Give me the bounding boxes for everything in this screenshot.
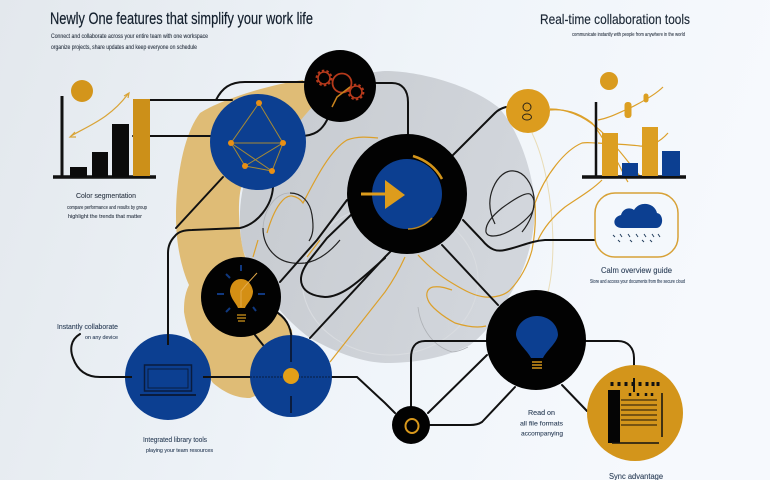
gray thin loop lines [263, 193, 468, 352]
caption: bulb: all file formats [520, 422, 563, 428]
caption: cloud card [590, 266, 685, 285]
icon: notebook circle [587, 365, 683, 461]
icon: small ring circle [392, 406, 430, 444]
caption: cloud card: Store and access your documents from the secure cloud [590, 279, 685, 285]
title: left: Newly One features that simplify your work life [50, 10, 313, 28]
caption: bulb: Read on [528, 408, 555, 417]
icon: gears circle [304, 50, 376, 122]
icon: yellow people circle [506, 89, 550, 133]
caption: left laptop note: Instantly collaborate [57, 324, 118, 331]
caption: left chart [67, 193, 147, 220]
caption: left laptop note [57, 324, 118, 341]
caption: bulb [520, 408, 563, 438]
subtitle: left: Connect and collaborate across your entire team with one workspace [51, 34, 209, 40]
curved thin black loops [263, 171, 534, 263]
icon: large bulb circle [486, 290, 586, 390]
tan background shape [176, 80, 312, 398]
gray background blob [240, 71, 535, 363]
icon: central play circle [347, 134, 467, 254]
icon: cloud card [595, 193, 678, 257]
caption: bulb: accompanying [521, 432, 563, 438]
caption: left chart: highlight the trends that matter [68, 214, 142, 220]
caption: left chart: compare performance and results by group [67, 205, 147, 211]
caption: laptop bottom: playing your team resources [146, 448, 213, 454]
caption: left chart: Color segmentation [76, 193, 136, 200]
faint inner ring [302, 205, 478, 355]
connector lines [71, 82, 634, 425]
caption: laptop bottom: Integrated library tools [143, 437, 207, 444]
icon: right bar chart [582, 72, 686, 177]
caption: left laptop note: on any device [85, 335, 118, 341]
thin pale line [532, 133, 553, 292]
icon: laptop circle [125, 334, 211, 420]
subtitle: left: organize projects, share updates and keep everyone on schedule [51, 45, 198, 51]
caption: cloud card: Calm overview guide [601, 266, 673, 275]
curved thin gold lines [253, 87, 668, 362]
icon: network circle [210, 94, 306, 190]
caption: laptop bottom [143, 437, 213, 454]
icon: left bar chart [53, 80, 156, 177]
title: right: Real-time collaboration tools [540, 11, 690, 27]
subtitle: left [51, 34, 209, 51]
icon: lightbulb circle small [201, 257, 281, 337]
icon: blue dot circle [250, 335, 332, 417]
subtitle: right: communicate instantly with people from anywhere in the world [572, 32, 685, 38]
